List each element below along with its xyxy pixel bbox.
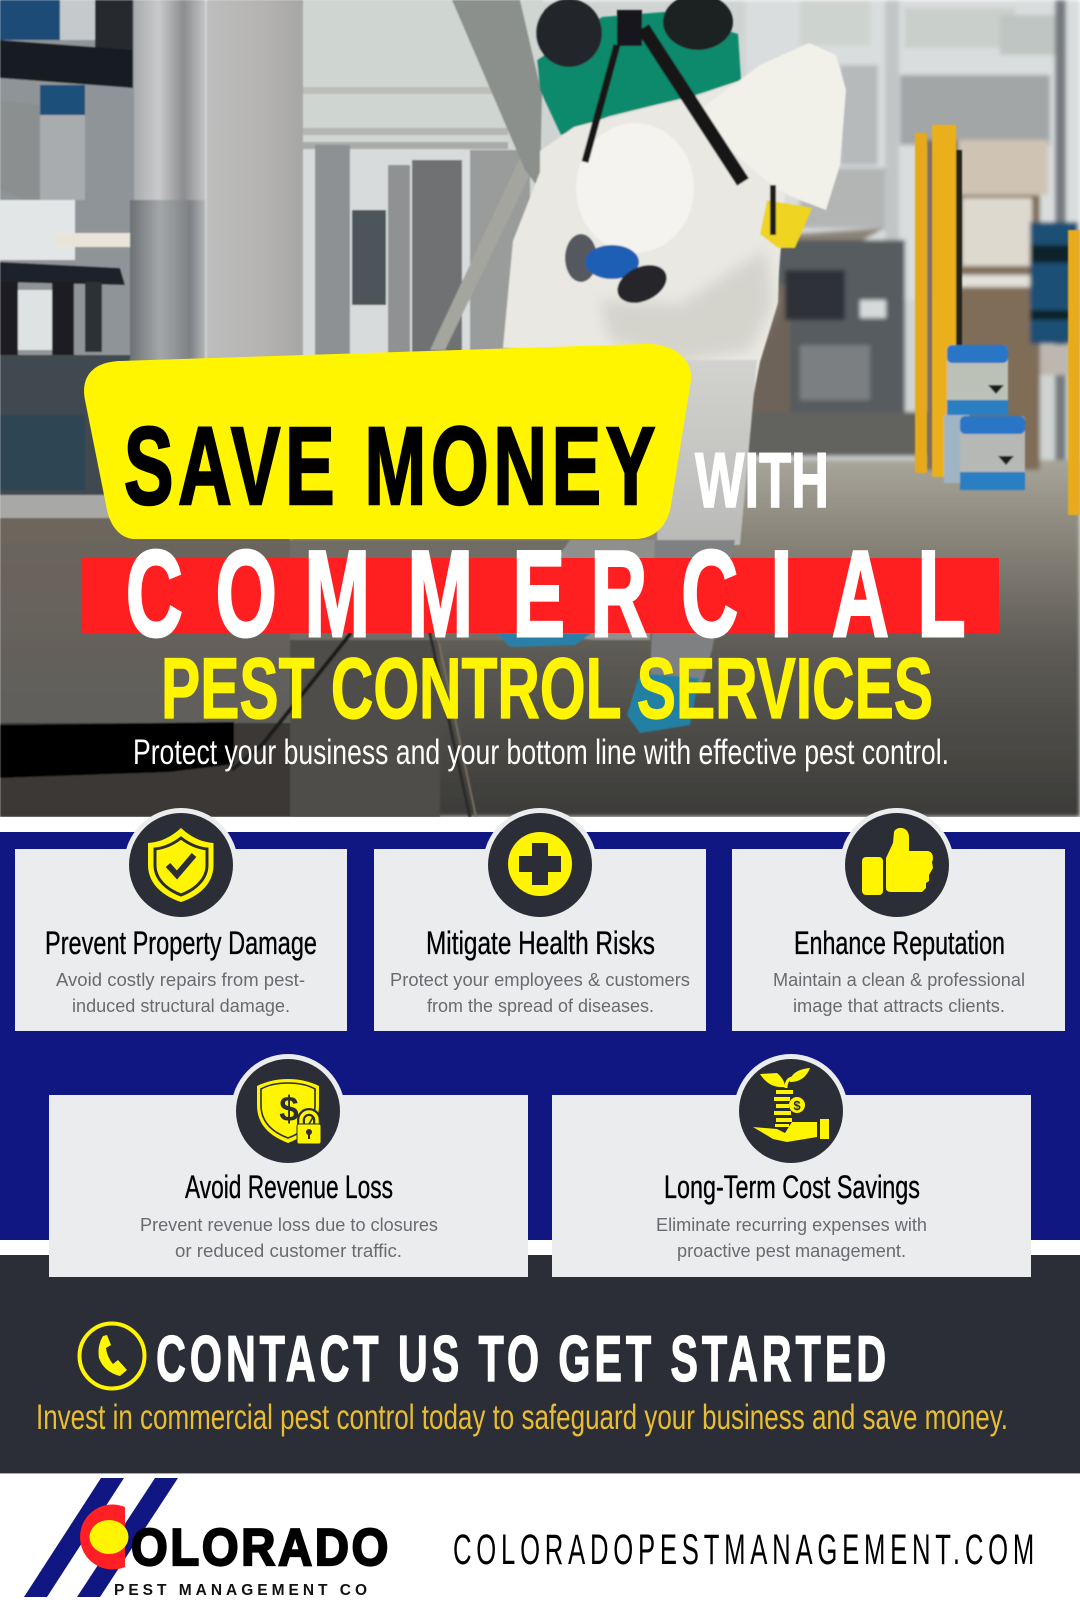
floor <box>290 460 1080 817</box>
icon: medical cross <box>483 808 597 922</box>
card description: Maintain a clean & professional <box>773 969 1025 990</box>
footer background <box>0 1473 1080 1600</box>
white band above contact panel <box>0 1240 1080 1255</box>
middle background <box>303 0 544 102</box>
heading: save money: SAVE MONEY <box>124 405 660 528</box>
yellow glove <box>760 200 812 248</box>
logo: colorado pest management: PEST MANAGEMENT CO <box>114 1582 371 1599</box>
card title: Enhance Reputation <box>794 925 1005 961</box>
card description <box>390 969 690 1016</box>
floor crack <box>427 620 470 817</box>
icon: hand holding coins and sprout: $ <box>793 1098 801 1113</box>
card description: from the spread of diseases. <box>427 995 654 1016</box>
card: enhance reputation <box>732 808 1065 1031</box>
heading: with: WITH <box>695 436 829 524</box>
stainless column <box>134 0 205 200</box>
red banner <box>81 558 999 633</box>
card description <box>773 969 1025 1016</box>
icon: shield with check <box>124 808 238 922</box>
blue shoe covers <box>496 633 592 647</box>
machinery right <box>770 240 905 415</box>
icon: hand holding coins and sprout <box>734 1054 848 1168</box>
card description: induced structural damage. <box>72 995 290 1016</box>
yellow headline badge <box>84 344 691 539</box>
card description <box>56 969 305 1016</box>
hero photo: technician spraying in a factory <box>0 0 1080 817</box>
card description: proactive pest management. <box>677 1240 906 1261</box>
heading: commercial: COMMERCIAL <box>126 525 966 662</box>
card: avoid revenue loss <box>49 1054 528 1277</box>
card description: image that attracts clients. <box>793 995 1005 1016</box>
straps <box>643 28 743 182</box>
card description <box>656 1214 927 1261</box>
respirator mask <box>565 234 597 282</box>
icon: shield with dollar and lock <box>231 1054 345 1168</box>
card: mitigate health risks <box>374 808 706 1031</box>
contact call to action <box>36 1322 1008 1437</box>
fence and racks <box>925 140 1040 470</box>
hood <box>576 123 694 253</box>
card title: Avoid Revenue Loss <box>185 1169 393 1205</box>
card description: Prevent revenue loss due to closures <box>140 1214 438 1235</box>
icon: phone <box>80 1324 144 1388</box>
protective suit <box>502 80 820 393</box>
icon: thumbs up <box>840 808 954 922</box>
yellow posts <box>915 133 927 473</box>
lower left steel box <box>0 718 300 817</box>
white band under photo <box>0 817 1080 832</box>
left machinery <box>0 0 134 360</box>
dark contact panel background <box>0 1255 1080 1473</box>
card description: Protect your employees & customers <box>390 969 690 990</box>
logo: colorado pest management <box>24 1478 391 1599</box>
card description: Avoid costly repairs from pest- <box>56 969 305 990</box>
navy benefits panel background <box>0 832 1080 1240</box>
card description <box>140 1214 438 1261</box>
card title: Long-Term Cost Savings <box>664 1169 920 1205</box>
far wall <box>745 0 1080 300</box>
card description: Eliminate recurring expenses with <box>656 1214 927 1235</box>
icon: shield with dollar and lock: $ <box>279 1090 299 1129</box>
headline <box>81 344 999 772</box>
card title: Prevent Property Damage <box>45 925 317 961</box>
card: prevent property damage <box>15 808 347 1031</box>
logo: colorado pest management: OLORADO <box>131 1519 391 1577</box>
card description: or reduced customer traffic. <box>175 1240 402 1261</box>
spray wand <box>232 633 351 770</box>
card title: Mitigate Health Risks <box>426 925 655 961</box>
blue chemical jugs <box>946 348 1009 402</box>
card: long-term cost savings <box>552 1054 1031 1277</box>
backpack tank <box>537 12 741 135</box>
hopper <box>800 168 885 228</box>
